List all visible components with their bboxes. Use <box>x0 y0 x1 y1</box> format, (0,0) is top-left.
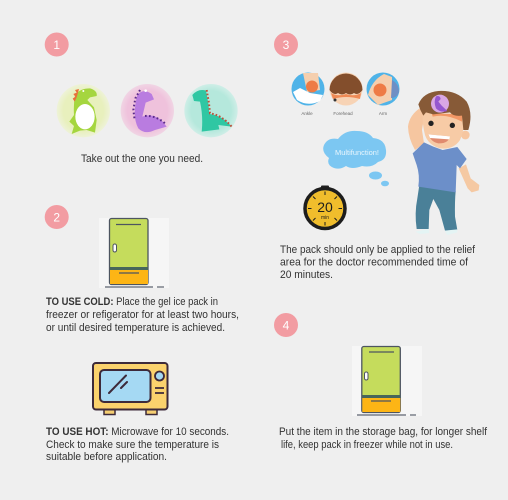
icon: purple dinosaur pack <box>121 84 174 137</box>
text: step 3 caption: 20 minutes. <box>280 269 333 281</box>
icon: microwave <box>93 363 168 414</box>
labels: body areas: Ankle <box>301 111 313 116</box>
icon: forehead circle <box>330 72 362 106</box>
boy raised arm <box>408 108 432 150</box>
text: to use hot: Check to make sure the temperature is <box>46 439 220 451</box>
text: step 3 caption: area for the doctor recommended time of <box>280 256 469 268</box>
boy legs <box>416 185 457 231</box>
step 3 badge: 3 <box>283 38 290 52</box>
text: step 4 caption: Put the item in the storage bag, for longer shelf <box>279 426 488 438</box>
icon: teal dinosaur pack <box>184 84 238 137</box>
step 2 badge: 2 <box>53 210 60 224</box>
step 2 badge <box>45 205 69 229</box>
icon: refrigerator in storage <box>352 346 422 416</box>
labels: body areas <box>301 111 387 116</box>
boy shoes <box>415 229 457 235</box>
text: to use cold: TO USE COLD: Place the gel ice pack in <box>46 296 218 308</box>
step 1 badge <box>45 32 69 56</box>
icon: gel pack on forehead <box>431 95 449 113</box>
boy shirt <box>413 142 467 192</box>
text: step 3 caption: The pack should only be applied to the relief <box>280 244 476 256</box>
boy ear <box>461 131 470 139</box>
boy flushed forehead <box>432 113 463 122</box>
text: to use cold: freezer or refigerator for at least two hours, <box>46 309 239 321</box>
boy right arm <box>459 164 479 192</box>
icon: green dinosaur pack <box>57 84 110 137</box>
icon: 20 minute timer <box>305 186 345 228</box>
icon: refrigerator <box>99 218 169 288</box>
labels: body areas: Forehead <box>333 111 353 116</box>
labels: body areas: Arm <box>379 111 387 116</box>
text: to use hot <box>46 426 229 463</box>
icon: 20 minute timer: min <box>321 215 329 221</box>
step 4 badge: 4 <box>283 318 290 332</box>
step 1 badge: 1 <box>53 38 60 52</box>
panel: three dinosaur gel packs <box>57 84 238 137</box>
text: to use cold <box>46 296 239 334</box>
text: step 4 caption: life, keep pack in freezer while not in use. <box>281 439 453 451</box>
text: to use hot: suitable before application. <box>46 451 167 463</box>
icon: arm circle <box>366 72 400 106</box>
boy face <box>428 121 434 126</box>
boy head <box>423 113 464 149</box>
callout: multifunction cloud: Multifunction! <box>335 150 379 157</box>
illustration: boy holding gel pack on forehead <box>408 91 479 235</box>
step 4 badge <box>274 313 298 337</box>
callout: multifunction cloud <box>323 131 389 186</box>
text: step 3 caption <box>280 244 476 281</box>
boy hair <box>418 91 470 130</box>
text: step 4 caption <box>279 426 488 451</box>
icon: ankle circle <box>292 72 324 106</box>
text: step 1 caption: Take out the one you need. <box>81 153 203 165</box>
icon: 20 minute timer: 20 <box>317 199 333 215</box>
step 3 badge <box>274 32 298 56</box>
text: to use hot: TO USE HOT: Microwave for 10 seconds. <box>46 426 229 438</box>
text: to use cold: or until desired temperature is achieved. <box>46 322 225 334</box>
